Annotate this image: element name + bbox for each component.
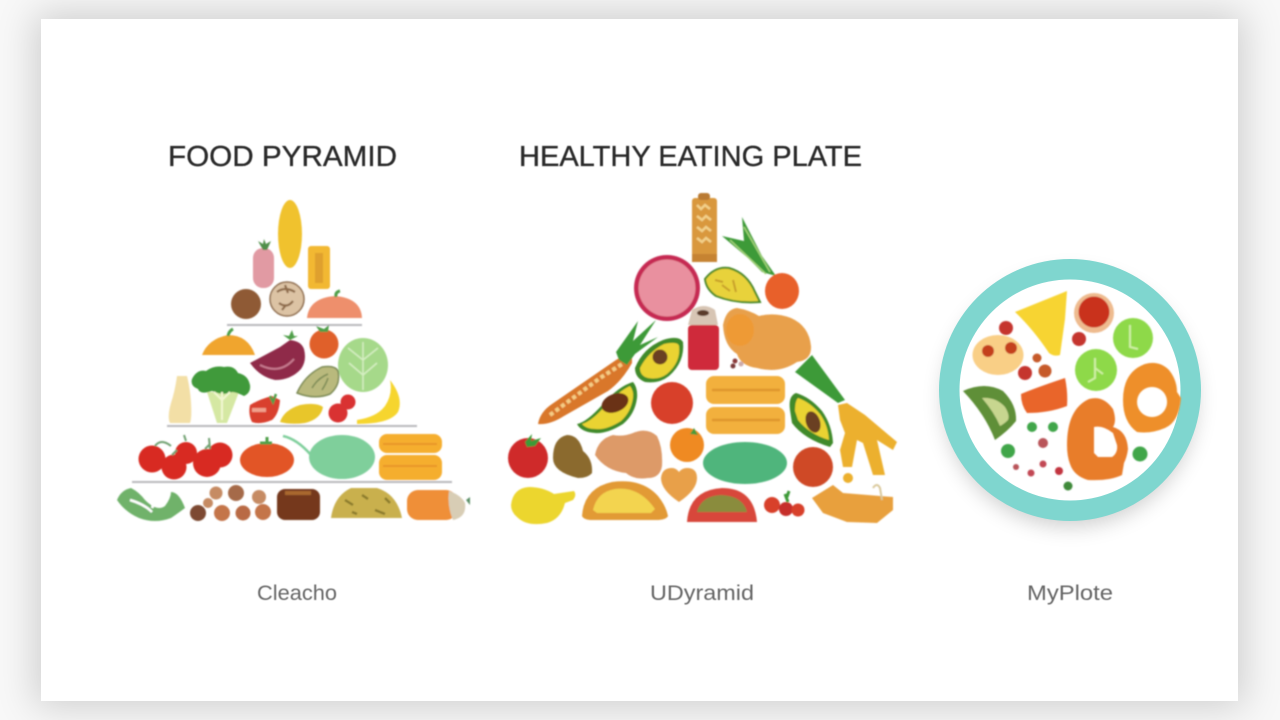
- ginger root: [838, 403, 897, 475]
- pizza: [1074, 293, 1114, 333]
- caption: left: Cleacho: [257, 582, 337, 605]
- plate surface: [960, 280, 1180, 500]
- orange ring: [1123, 363, 1181, 432]
- middle tier foods: [169, 325, 400, 424]
- cheese wedge: [1015, 291, 1067, 356]
- green discs: [1113, 318, 1153, 358]
- green fan: [963, 386, 1016, 440]
- top foods: [634, 193, 799, 321]
- lower tier foods: [138, 434, 442, 480]
- green onion: [795, 355, 845, 403]
- red dots: [999, 321, 1013, 335]
- green peas: [1027, 422, 1037, 432]
- food pyramid illustration: [117, 200, 470, 521]
- egg blob: [972, 335, 1024, 375]
- title: Healthy Eating Plate: HEALTHY EATING PLATE: [519, 141, 862, 173]
- plate rim: [939, 259, 1201, 521]
- base foods: [511, 473, 893, 524]
- middle foods: [538, 306, 897, 475]
- healthy eating plate illustration: [508, 193, 897, 524]
- MyPlate illustration: [939, 259, 1201, 526]
- plate shadow: [944, 274, 1196, 526]
- shelf lines: [132, 325, 452, 482]
- bread loaf: [812, 485, 893, 523]
- top tier foods: [231, 200, 362, 319]
- caption: right: MyPlote: [1027, 582, 1113, 605]
- title: Food Pyramid: FOOD PYRAMID: [168, 141, 397, 173]
- orange slab: [1021, 378, 1067, 413]
- red bits: [1038, 438, 1048, 448]
- base tier foods: [117, 485, 470, 521]
- lower foods: [508, 428, 833, 502]
- large orange ring: [1067, 398, 1128, 480]
- caption: middle: UDyramid: [650, 582, 754, 605]
